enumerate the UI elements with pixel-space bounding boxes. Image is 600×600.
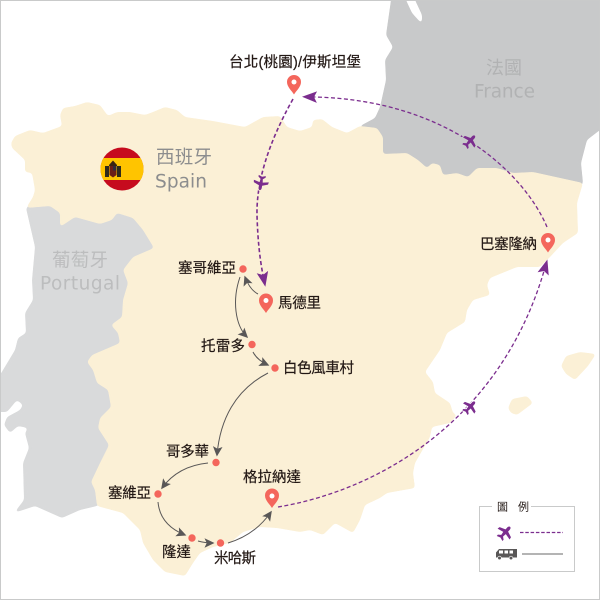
bus route: windmill village to Cordoba	[217, 373, 268, 455]
country label: France: 法國	[486, 58, 522, 78]
country label: Spain: Spain	[155, 172, 207, 192]
Ibiza island	[508, 396, 533, 415]
country label: Spain: 西班牙	[156, 146, 212, 168]
Portugal landmass	[0, 200, 160, 518]
country label: France	[474, 58, 535, 102]
stop: Toledo	[248, 341, 256, 348]
flight route: Granada to Barcelona	[278, 271, 544, 507]
stop: Segovia	[239, 265, 247, 273]
label: Seville: 塞維亞	[108, 484, 151, 502]
flight route: Barcelona to Taipei	[314, 97, 547, 227]
icon: plane on Granada to Barcelona route	[459, 397, 480, 418]
label: windmill village: 白色風車村	[283, 360, 354, 377]
bus route: Seville to Ronda	[158, 502, 185, 535]
stop: Ronda	[188, 534, 196, 542]
bus route: Madrid to Segovia	[245, 277, 258, 294]
legend: bus symbol	[496, 549, 563, 560]
country label: France: France	[474, 82, 535, 102]
label: Mijas: 米哈斯	[214, 550, 256, 567]
bus route: Mijas to Granada	[228, 512, 271, 543]
label: Ronda: 隆達	[162, 544, 192, 561]
stop: Seville	[154, 490, 162, 498]
bus route: Segovia to Toledo	[236, 277, 247, 337]
label: Toledo: 托雷多	[201, 337, 245, 355]
pin: Taipei	[287, 75, 301, 94]
label: Cordoba: 哥多華	[166, 442, 209, 460]
country label: Portugal: 葡萄牙	[52, 250, 108, 270]
stop: Cordoba	[212, 459, 220, 466]
pin: Madrid	[259, 294, 273, 313]
country label: Portugal: Portugal	[40, 274, 120, 294]
Spain landmass	[11, 102, 583, 576]
Mallorca island	[561, 352, 596, 380]
pin: Barcelona	[541, 233, 555, 252]
label: Taipei / Istanbul: 台北(桃園)/伊斯坦堡	[229, 54, 361, 71]
stop: windmill village	[271, 364, 279, 372]
flag of Spain	[100, 148, 144, 190]
legend	[480, 500, 574, 572]
bus route: Toledo to windmill village	[253, 352, 268, 365]
legend: flight symbol	[494, 521, 563, 544]
country label: Portugal	[40, 250, 120, 294]
icon: plane on Barcelona to Taipei route	[459, 131, 480, 152]
pin: Granada	[265, 488, 279, 508]
label: Barcelona: 巴塞隆納	[480, 235, 537, 253]
flight route: Taipei to Madrid	[257, 99, 293, 275]
France landmass	[360, 0, 600, 190]
bus route: Cordoba to Seville	[162, 463, 208, 488]
bus route: Ronda to Mijas	[198, 541, 213, 543]
icon: plane on Taipei to Madrid route	[252, 174, 270, 191]
stop: Mijas	[217, 539, 224, 547]
country label: Spain	[155, 146, 212, 192]
legend title: 圖 例	[497, 500, 529, 514]
label: Granada: 格拉納達	[243, 469, 302, 486]
label: Madrid: 馬德里	[278, 295, 321, 312]
label: Segovia: 塞哥維亞	[178, 259, 236, 277]
